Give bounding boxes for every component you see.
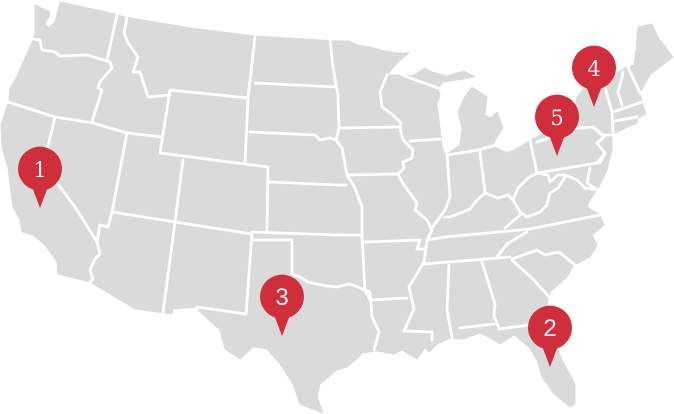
pin 5: Pennsylvania xyxy=(535,95,579,156)
pin 4: New York xyxy=(572,46,616,107)
pin 4: New York: 4 xyxy=(587,57,601,81)
pin 1: California xyxy=(18,147,62,208)
pin 3: Texas: 3 xyxy=(275,284,289,311)
pin 2: Florida xyxy=(528,306,572,367)
pin 3: Texas xyxy=(260,275,304,336)
pin 2: Florida: 2 xyxy=(543,315,557,342)
state borders xyxy=(8,15,642,350)
pin 5: Pennsylvania: 5 xyxy=(550,106,564,130)
pin 1: California: 1 xyxy=(33,158,47,182)
